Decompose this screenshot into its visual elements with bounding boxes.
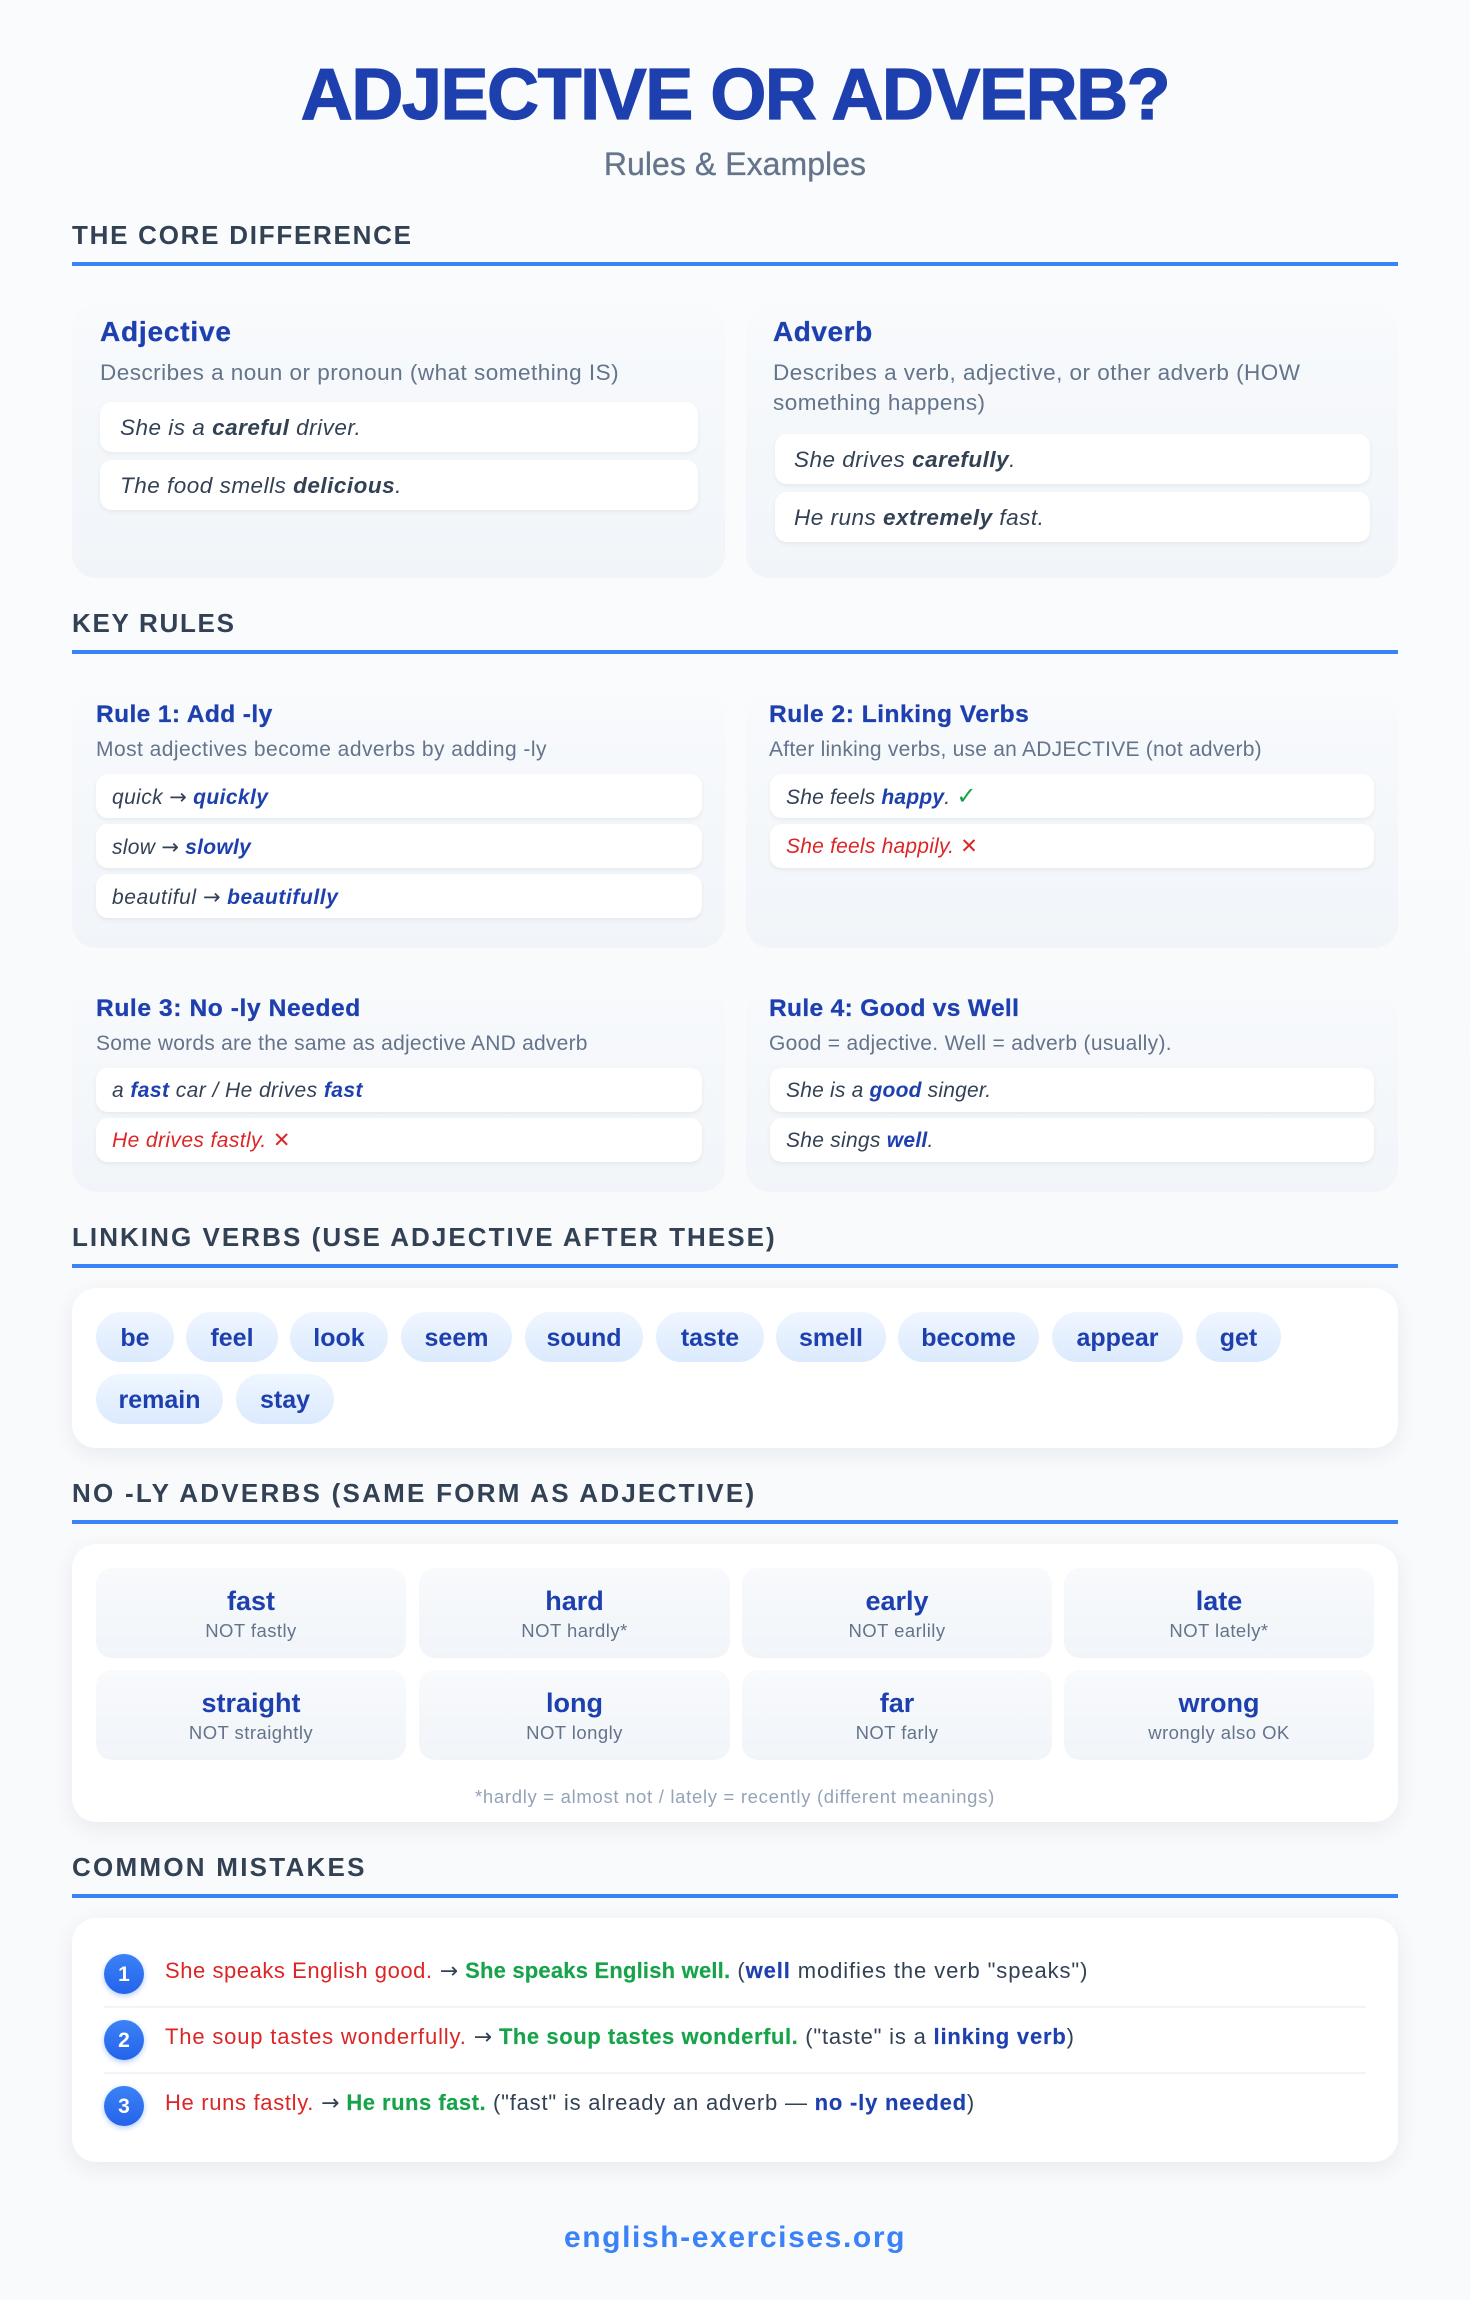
mistake 2 text: The soup tastes wonderfully. → The soup tastes wonderful. ("taste" is a linking verb): [165, 2024, 1075, 2050]
section heading: the core difference: [72, 215, 1398, 266]
rule 3 heading: Rule 3: No -ly Needed: [96, 995, 361, 1022]
mistake 3 text: He runs fastly. → He runs fast. ("fast" is already an adverb — no -ly needed): [165, 2090, 975, 2116]
pill: seem: [401, 1312, 512, 1362]
word card: early: NOT earlily: [848, 1620, 946, 1641]
example: carefully: She drives carefully.: [794, 447, 1016, 472]
section heading: no -ly adverbs: NO -LY ADVERBS (SAME FORM AS ADJECTIVE): [72, 1478, 756, 1508]
pill: feel: feel: [210, 1324, 254, 1352]
footnote: *hardly = almost not / lately = recently (different meanings): [475, 1786, 995, 1807]
example: fast: [96, 1068, 702, 1112]
adjective heading: Adjective: [100, 316, 232, 347]
pill: taste: taste: [681, 1324, 739, 1352]
pill: taste: [656, 1312, 764, 1362]
panel: rule 4: [746, 983, 1398, 1192]
pill: appear: appear: [1076, 1324, 1158, 1352]
example: delicious: [100, 460, 698, 510]
example: incorrect happily: She feels happily. ✕: [786, 835, 978, 858]
section heading: linking verbs: [72, 1217, 1398, 1268]
example: correct happy: [770, 774, 1374, 818]
example: extremely: [775, 492, 1370, 542]
section heading: common mistakes: COMMON MISTAKES: [72, 1852, 367, 1882]
example: delicious: The food smells delicious.: [120, 473, 402, 498]
pill: look: [290, 1312, 388, 1362]
word card: wrong: wrong: [1178, 1688, 1260, 1718]
word card: hard: NOT hardly*: [521, 1620, 628, 1641]
example: extremely: He runs extremely fast.: [794, 505, 1044, 530]
panel: rule 3: [72, 983, 725, 1192]
subtitle: Rules & Examples: [604, 146, 866, 182]
section heading: no -ly adverbs: [72, 1473, 1398, 1524]
word card: hard: hard: [545, 1586, 604, 1616]
pill: remain: remain: [118, 1386, 200, 1414]
rule 4 description: Good = adjective. Well = adverb (usually).: [769, 1032, 1172, 1055]
mistake 1 text: She speaks English good. → She speaks English well. (well modifies the verb "speaks"): [165, 1958, 1088, 1984]
rule 2 heading: Rule 2: Linking Verbs: [769, 701, 1029, 728]
example: well: [770, 1118, 1374, 1162]
rule 3 description: Some words are the same as adjective AND adverb: [96, 1032, 588, 1055]
example: carefully: [775, 434, 1370, 484]
word card: fast: NOT fastly: [205, 1620, 297, 1641]
example: correct happy: She feels happy. ✓: [786, 783, 977, 810]
word card: wrong: wrongly also OK: [1148, 1722, 1290, 1743]
section heading: common mistakes: [72, 1847, 1398, 1898]
pill: smell: [776, 1312, 886, 1362]
example: incorrect fastly: [96, 1118, 702, 1162]
section heading: linking verbs: LINKING VERBS (USE ADJECTIVE AFTER THESE): [72, 1222, 777, 1252]
pill: smell: smell: [799, 1324, 863, 1352]
section heading: the core difference: THE CORE DIFFERENCE: [72, 220, 413, 250]
rule 2 description: After linking verbs, use an ADJECTIVE (not adverb): [769, 738, 1262, 761]
pill: sound: sound: [546, 1324, 622, 1352]
rule 1 heading: Rule 1: Add -ly: [96, 701, 273, 728]
word card: long: NOT longly: [526, 1722, 623, 1743]
pill: remain: [96, 1374, 223, 1424]
panel: linking verbs list: [72, 1288, 1398, 1448]
rule 1 description: Most adjectives become adverbs by adding -ly: [96, 738, 547, 761]
example: good: [770, 1068, 1374, 1112]
number badge 1: 1: [118, 1963, 130, 1986]
number badge 1: [104, 1954, 144, 1994]
word card: late: late: [1196, 1586, 1242, 1616]
word card: late: NOT lately*: [1169, 1620, 1269, 1641]
footer: website: english-exercises.org: [564, 2221, 906, 2254]
word card: hard: [419, 1568, 730, 1658]
example: incorrect happily: [770, 824, 1374, 868]
number badge 2: [104, 2020, 144, 2060]
panel: rule 2: [746, 694, 1398, 948]
example: well: She sings well.: [786, 1129, 934, 1152]
pill: be: be: [120, 1324, 150, 1352]
pill: look: look: [313, 1324, 365, 1352]
panel: no -ly adverbs grid: [72, 1544, 1398, 1822]
section heading: key rules: [72, 603, 1398, 654]
example: beautifully: [96, 874, 702, 918]
panel: adjective: [72, 305, 725, 578]
pill: get: get: [1220, 1324, 1257, 1352]
word card: straight: straight: [201, 1688, 300, 1718]
word card: far: far: [880, 1688, 914, 1718]
word card: early: early: [865, 1586, 929, 1616]
word card: early: [742, 1568, 1052, 1658]
adverb definition: something happens): [773, 390, 986, 415]
word card: far: [742, 1670, 1052, 1760]
pill: be: [96, 1312, 174, 1362]
word card: long: long: [546, 1688, 603, 1718]
example: careful: She is a careful driver.: [120, 415, 361, 440]
panel: rule 1: [72, 694, 725, 948]
word card: fast: fast: [227, 1586, 275, 1616]
adverb definition: Describes a verb, adjective, or other adverb (HOW: [773, 360, 1300, 385]
adjective definition: Describes a noun or pronoun (what something IS): [100, 360, 619, 385]
pill: sound: [525, 1312, 643, 1362]
rule 4 heading: Rule 4: Good vs Well: [769, 995, 1019, 1022]
panel: adverb: [746, 305, 1398, 578]
number badge 2: 2: [118, 2029, 130, 2052]
pill: feel: [186, 1312, 278, 1362]
example: good: She is a good singer.: [786, 1079, 991, 1102]
example: incorrect fastly: He drives fastly. ✕: [112, 1129, 291, 1152]
word card: straight: NOT straightly: [189, 1722, 313, 1743]
pill: seem: seem: [425, 1324, 488, 1352]
word card: wrong: [1064, 1670, 1374, 1760]
number badge 3: 3: [118, 2095, 130, 2118]
section heading: key rules: KEY RULES: [72, 608, 236, 638]
pill: stay: stay: [260, 1386, 310, 1414]
pill: stay: [236, 1374, 334, 1424]
panel: common mistakes: [72, 1918, 1398, 2162]
pill: get: [1196, 1312, 1281, 1362]
word card: long: [419, 1670, 730, 1760]
number badge 3: [104, 2086, 144, 2126]
word card: far: NOT farly: [856, 1722, 938, 1743]
example: beautifully: beautiful → beautifully: [112, 885, 338, 909]
example: careful: [100, 402, 698, 452]
pill: become: become: [921, 1324, 1016, 1352]
pill: appear: [1052, 1312, 1183, 1362]
title: ADJECTIVE OR ADVERB?: [301, 55, 1169, 135]
word card: fast: [96, 1568, 406, 1658]
adverb heading: Adverb: [773, 316, 873, 347]
example: slowly: slow → slowly: [112, 835, 251, 859]
example: quickly: [96, 774, 702, 818]
example: slowly: [96, 824, 702, 868]
adverb definition: [773, 360, 1300, 415]
pill: become: [898, 1312, 1039, 1362]
example: quickly: quick → quickly: [112, 785, 268, 809]
word card: straight: [96, 1670, 406, 1760]
word card: late: [1064, 1568, 1374, 1658]
example: fast: a fast car / He drives fast: [112, 1079, 363, 1102]
